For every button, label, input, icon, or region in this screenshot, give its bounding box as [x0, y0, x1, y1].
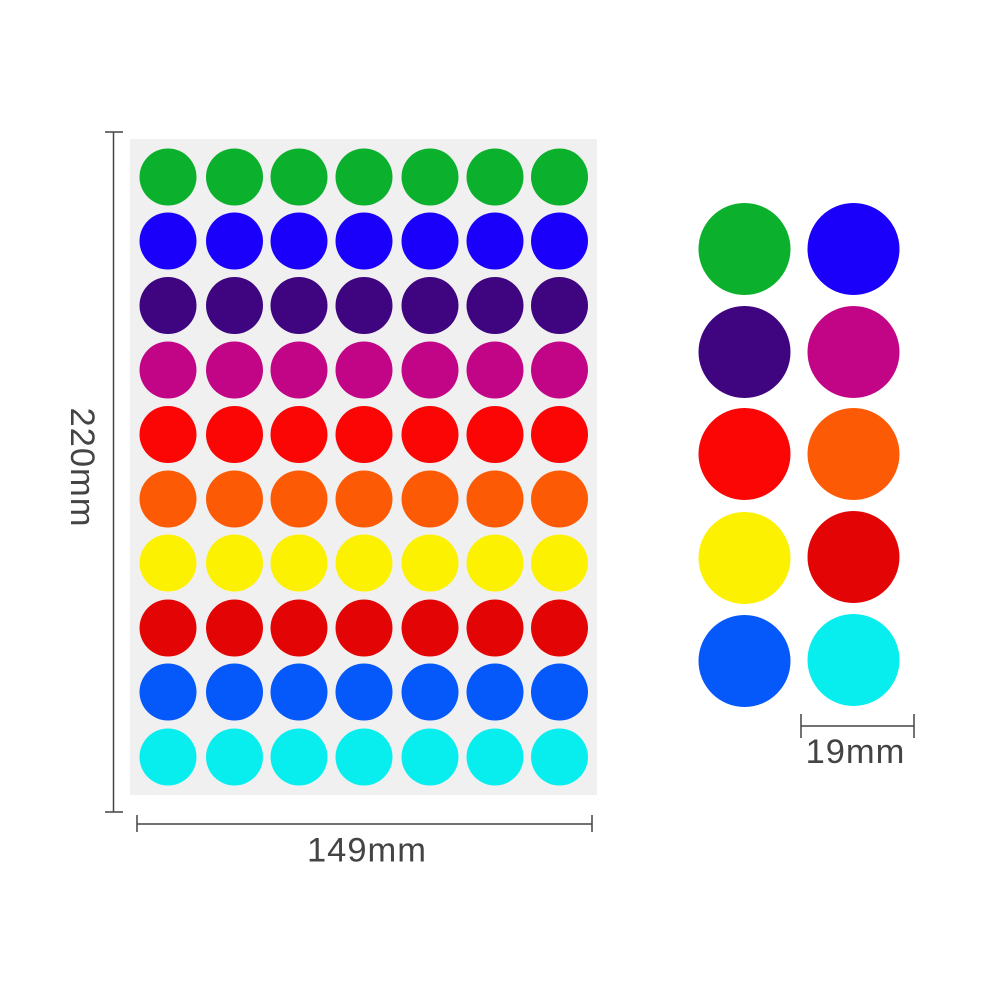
panel: sticker sheet: [130, 139, 597, 795]
row: magenta dots: [140, 342, 588, 398]
width dimension: 149mm: [137, 815, 592, 870]
row: purple dots: [140, 277, 588, 334]
row: red dots: [140, 406, 588, 463]
row: orange dots: [140, 470, 588, 528]
diameter dimension: 19mm: 19mm: [806, 733, 905, 771]
row: blue dots: [140, 212, 588, 270]
height dimension: 220mm: [63, 132, 123, 812]
panel: colour swatches: [698, 203, 900, 707]
row: azure dots: [140, 664, 588, 720]
diameter dimension: 19mm: [801, 714, 914, 771]
row: cyan dots: [140, 728, 588, 786]
height dimension: 220mm: 220mm: [63, 407, 101, 528]
row: green dots: [140, 148, 588, 206]
width dimension: 149mm: 149mm: [307, 832, 427, 870]
row: yellow dots: [140, 534, 588, 592]
row: dark red dots: [140, 600, 588, 656]
